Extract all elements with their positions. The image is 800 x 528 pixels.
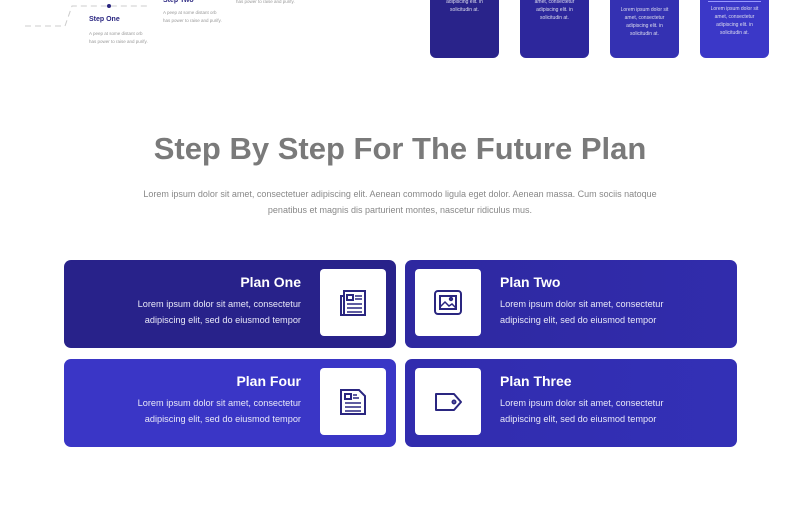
goal cards fragment: adipiscing elit. in <box>626 23 663 29</box>
goal cards fragment: adipiscing elit. in <box>716 22 753 28</box>
panel: plan three: adipiscing elit, sed do eiusmod tempor <box>500 414 656 424</box>
panel: plan four <box>64 359 396 447</box>
panel: plan three: Lorem ipsum dolor sit amet, consectetur <box>500 398 663 408</box>
goal cards fragment: solicitudin at. <box>540 15 569 21</box>
icon: document <box>320 368 386 435</box>
goal cards fragment: adipiscing elit. in <box>536 7 573 13</box>
panel: plan two: Plan Two <box>500 274 560 290</box>
goal cards fragment <box>430 0 769 58</box>
timeline fragment: A peep at some distant orb has power to raise and purify. <box>163 10 222 22</box>
timeline fragment: Step One <box>89 16 120 23</box>
panel: plan two: adipiscing elit, sed do eiusmod tempor <box>500 315 656 325</box>
goal cards fragment: solicitudin at. <box>450 7 479 13</box>
goal cards fragment: solicitudin at. <box>720 30 749 36</box>
timeline fragment <box>25 0 295 44</box>
subtitle: Lorem ipsum dolor sit amet, consectetuer adipiscing elit. Aenean commodo ligula eget dolor. Aenean massa. Cum sociis natoque penatibus et magnis dis parturient montes, nascetur ridiculus mus. <box>143 189 657 215</box>
icon: newspaper <box>320 269 386 336</box>
panel: plan two: Lorem ipsum dolor sit amet, consectetur <box>500 299 663 309</box>
panel: plan one: Plan One <box>240 274 301 290</box>
panel: plan three: Plan Three <box>500 373 572 389</box>
panel: plan one: Lorem ipsum dolor sit amet, consectetur <box>138 299 301 309</box>
timeline fragment: A peep at some distant orb has power to raise and purify. <box>89 31 148 44</box>
goal cards fragment: solicitudin at. <box>630 31 659 37</box>
goal cards fragment: amet, consectetur <box>715 14 754 20</box>
icon: image <box>415 269 481 336</box>
panel: plan two <box>405 260 737 348</box>
goal cards fragment: amet, consectetur <box>625 15 664 21</box>
goal cards fragment: Lorem ipsum dolor sit <box>711 6 758 12</box>
panel: plan one: adipiscing elit, sed do eiusmod tempor <box>145 315 301 325</box>
panel: plan four: Plan Four <box>236 373 301 389</box>
panel: plan four: Lorem ipsum dolor sit amet, consectetur <box>138 398 301 408</box>
panel: plan four: adipiscing elit, sed do eiusmod tempor <box>145 414 301 424</box>
icon: tag <box>415 368 481 435</box>
goal cards fragment: Lorem ipsum dolor sit <box>621 7 668 13</box>
title: Step By Step For The Future Plan <box>154 131 646 166</box>
panel: plan three <box>405 359 737 447</box>
panel: plan one <box>64 260 396 348</box>
